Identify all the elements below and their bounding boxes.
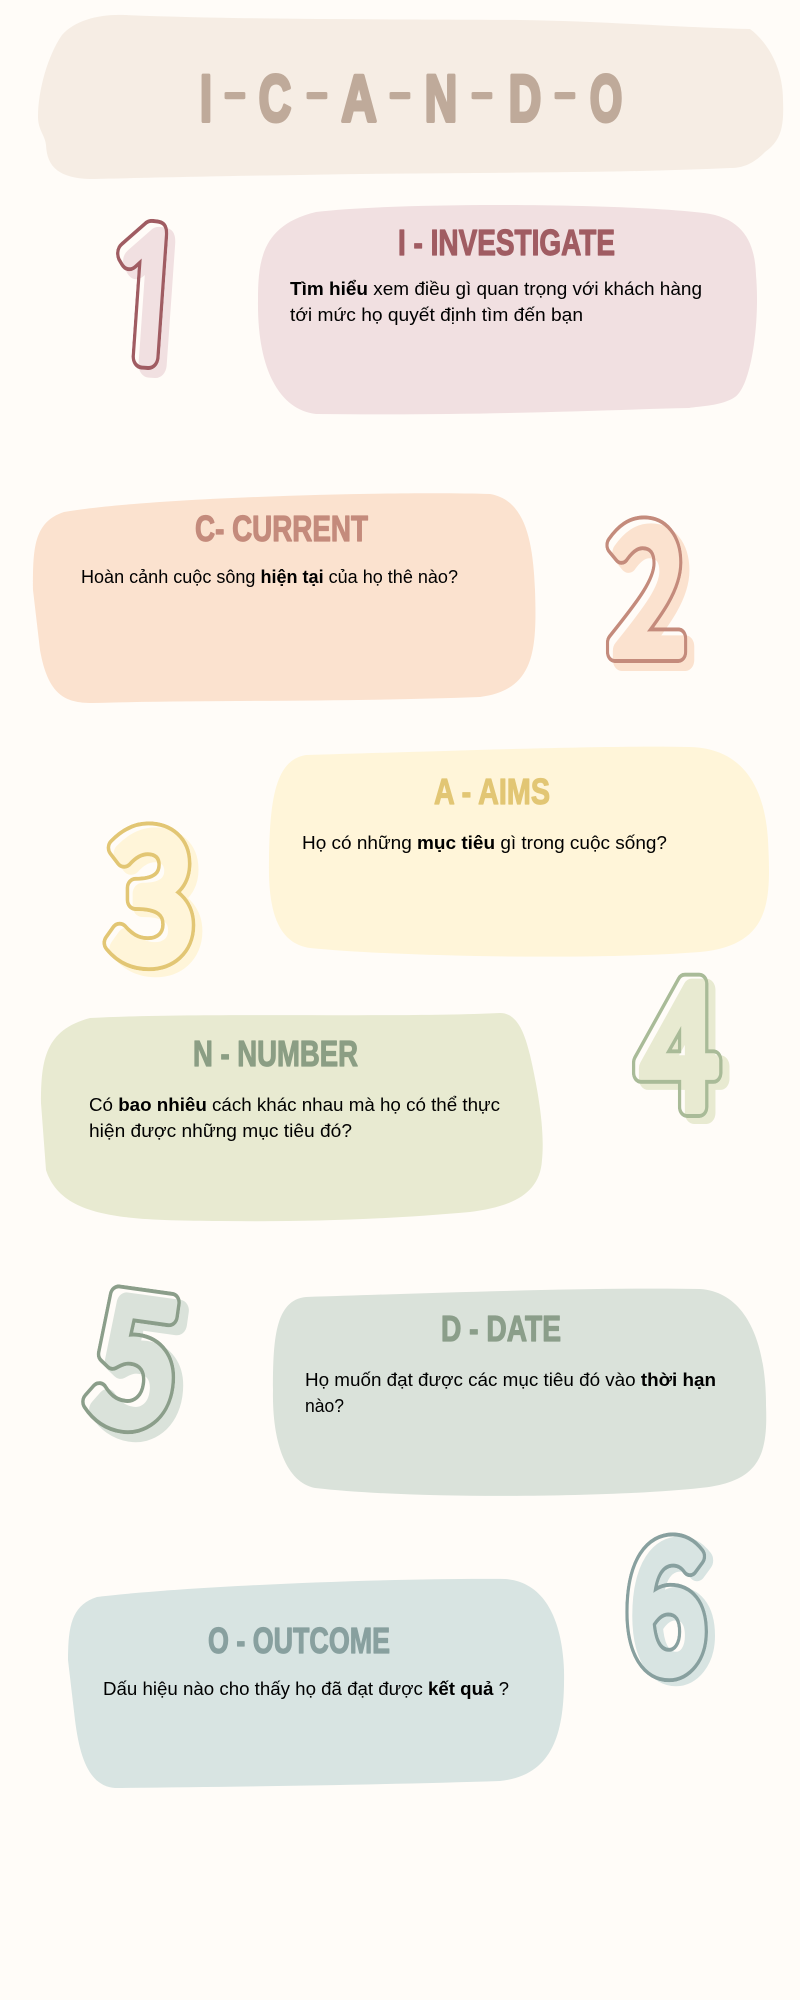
panel 5 blob <box>273 1289 766 1496</box>
panel 5 body text: nào? <box>305 1395 344 1416</box>
number 4 shadow: 4 <box>645 913 725 1163</box>
panel 4 body text: Có bao nhiêu cách khác nhau mà họ có thể thực <box>89 1094 500 1115</box>
title text: I <box>200 62 212 135</box>
panel 1 heading: I - INVESTIGATE <box>398 222 615 263</box>
panel 1 body text <box>290 278 702 325</box>
number 2 shadow: 2 <box>616 460 692 711</box>
panel 3 body text: Họ có những mục tiêu gì trong cuộc sống? <box>302 832 667 853</box>
panel 3 heading: A - AIMS <box>434 771 550 812</box>
number 2 outline: 2 <box>609 452 685 703</box>
number 3 shadow: 3 <box>115 764 201 1014</box>
number 1 shadow: 1 <box>103 215 202 394</box>
panel 1 body text: Tìm hiểu xem điều gì quan trọng với khách hàng <box>290 278 702 299</box>
number 6 outline: 6 <box>627 1468 705 1719</box>
number 5 shadow: 5 <box>86 1225 203 1484</box>
number 4 <box>632 972 730 1124</box>
number 3 <box>102 822 202 978</box>
number 5 outline: 5 <box>78 1217 195 1476</box>
panel 2 body text: Hoàn cảnh cuộc sông hiện tại của họ thê nào? <box>81 566 458 587</box>
number 6 shadow: 6 <box>634 1472 712 1723</box>
title text: - <box>224 70 246 115</box>
panel 6 blob <box>68 1579 564 1788</box>
panel: C - Current <box>33 493 535 703</box>
panel 5 heading: D - DATE <box>441 1308 561 1349</box>
panel 5 body text: Họ muốn đạt được các mục tiêu đó vào thời hạn <box>305 1369 716 1390</box>
number 6 <box>625 1532 715 1686</box>
title text: O <box>590 61 622 135</box>
panel: D - Date <box>273 1289 766 1496</box>
panel 2 blob <box>33 493 535 703</box>
panel 5 body text <box>305 1369 716 1416</box>
panel: O - Outcome <box>68 1579 564 1788</box>
title text: C <box>259 61 291 135</box>
number 5 <box>81 1284 189 1442</box>
number 1 outline: 1 <box>96 207 195 386</box>
title text <box>200 61 622 136</box>
number 1 <box>116 218 176 378</box>
panel: I - Investigate <box>258 205 757 414</box>
title text: - <box>389 70 411 115</box>
title banner <box>38 15 783 179</box>
title text: N <box>425 61 457 135</box>
panel 6 body text: Dấu hiệu nào cho thấy họ đã đạt được kết quả ? <box>103 1678 509 1699</box>
title text: - <box>471 70 493 115</box>
panel 4 body text: hiện được những mục tiêu đó? <box>89 1120 352 1141</box>
number 3 outline: 3 <box>108 758 194 1008</box>
title text: A <box>341 62 377 136</box>
panel 1 blob <box>258 205 757 414</box>
title blob <box>38 15 783 179</box>
title text: - <box>306 70 328 115</box>
panel: N - Number <box>41 1013 543 1221</box>
panel 1 body text: tới mức họ quyết định tìm đến bạn <box>290 304 583 325</box>
title text: - <box>554 70 576 115</box>
panel 2 heading: C- CURRENT <box>195 508 368 549</box>
number 4 outline: 4 <box>638 907 718 1157</box>
panel 4 blob <box>41 1013 543 1221</box>
title text: D <box>509 61 541 135</box>
panel 3 blob <box>269 747 769 957</box>
panel: A - Aims <box>269 747 769 957</box>
panel 4 heading: N - NUMBER <box>193 1033 358 1074</box>
number 2 <box>605 516 694 671</box>
panel 6 heading: O - OUTCOME <box>208 1620 390 1661</box>
panel 4 body text <box>89 1094 500 1141</box>
